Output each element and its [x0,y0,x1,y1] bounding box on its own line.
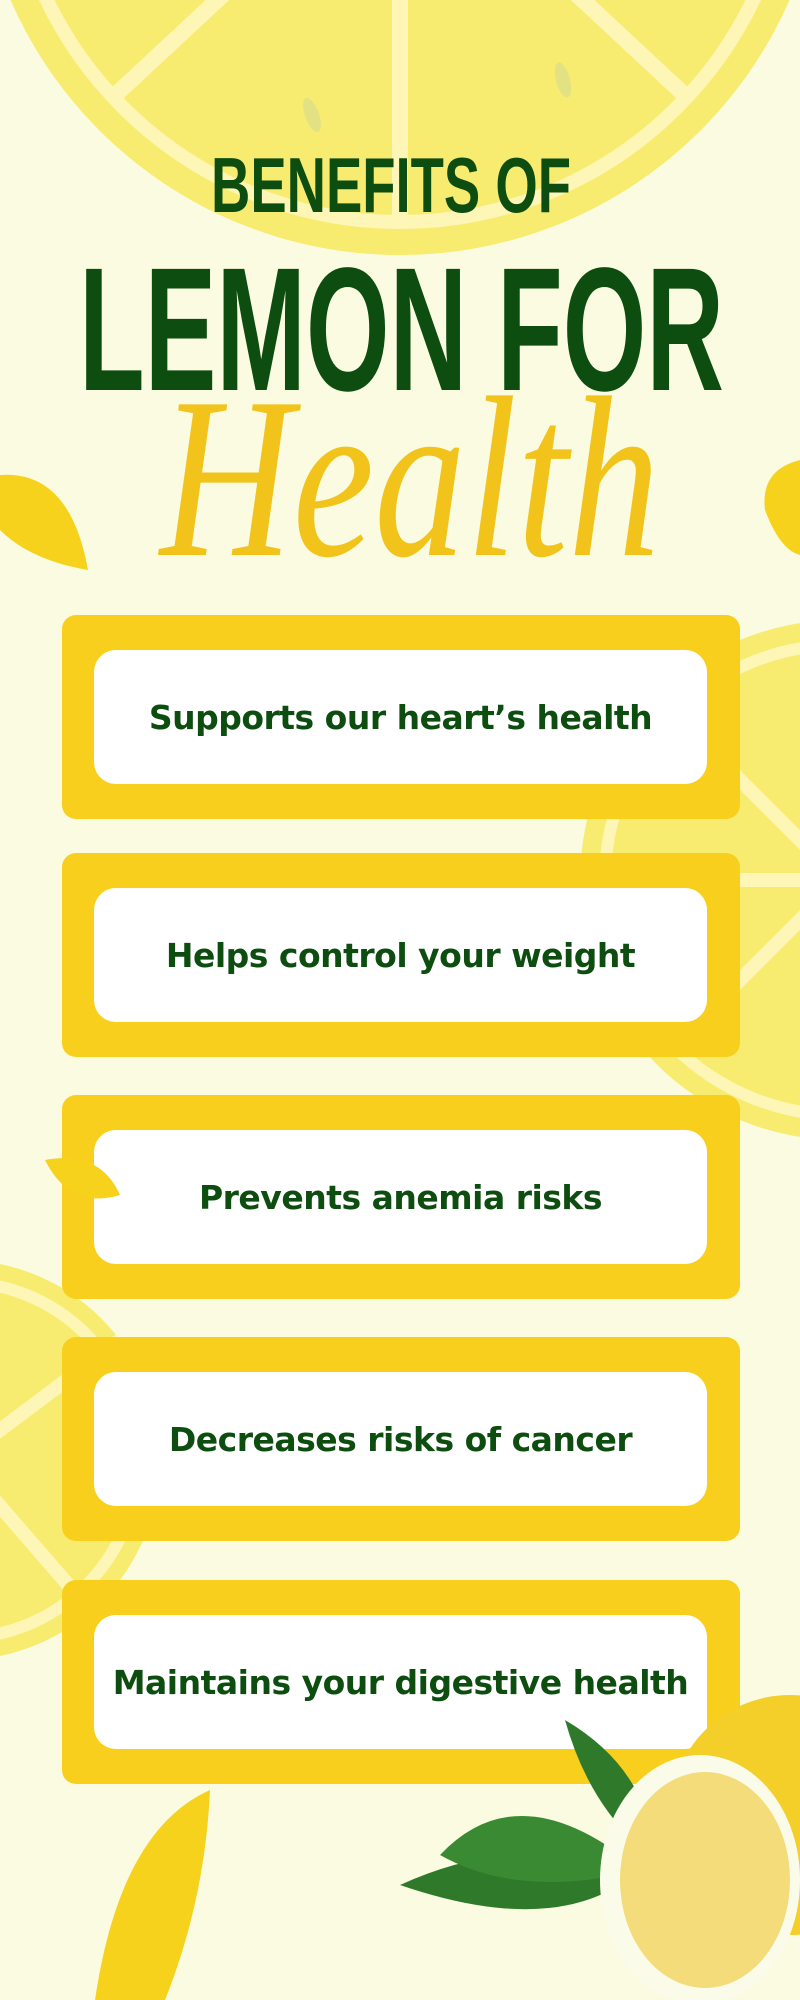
card 1 [62,615,740,819]
icon: right lemon slice [580,620,800,1140]
icon: top lemon slice [0,0,800,255]
title [79,141,724,605]
icon: yellow leaf left [0,475,88,570]
card 1: Supports our heart’s health [149,698,652,736]
card 4 [62,1337,740,1541]
title: Health [158,350,660,605]
card 3: Prevents anemia risks [199,1178,602,1216]
card 4: Decreases risks of cancer [169,1420,632,1458]
icon: yellow leaf right [764,460,800,555]
card 2: Helps control your weight [166,936,635,974]
icon: yellow leaf bottom [95,1790,210,2000]
icon: small leaf on card 3 [45,1158,120,1198]
icon: left lemon slice [0,1260,160,1660]
card 3 [62,1095,740,1299]
card 5: Maintains your digestive health [113,1662,688,1702]
title: BENEFITS OF [211,141,571,229]
card 5 [62,1580,740,1784]
card 2 [62,853,740,1057]
